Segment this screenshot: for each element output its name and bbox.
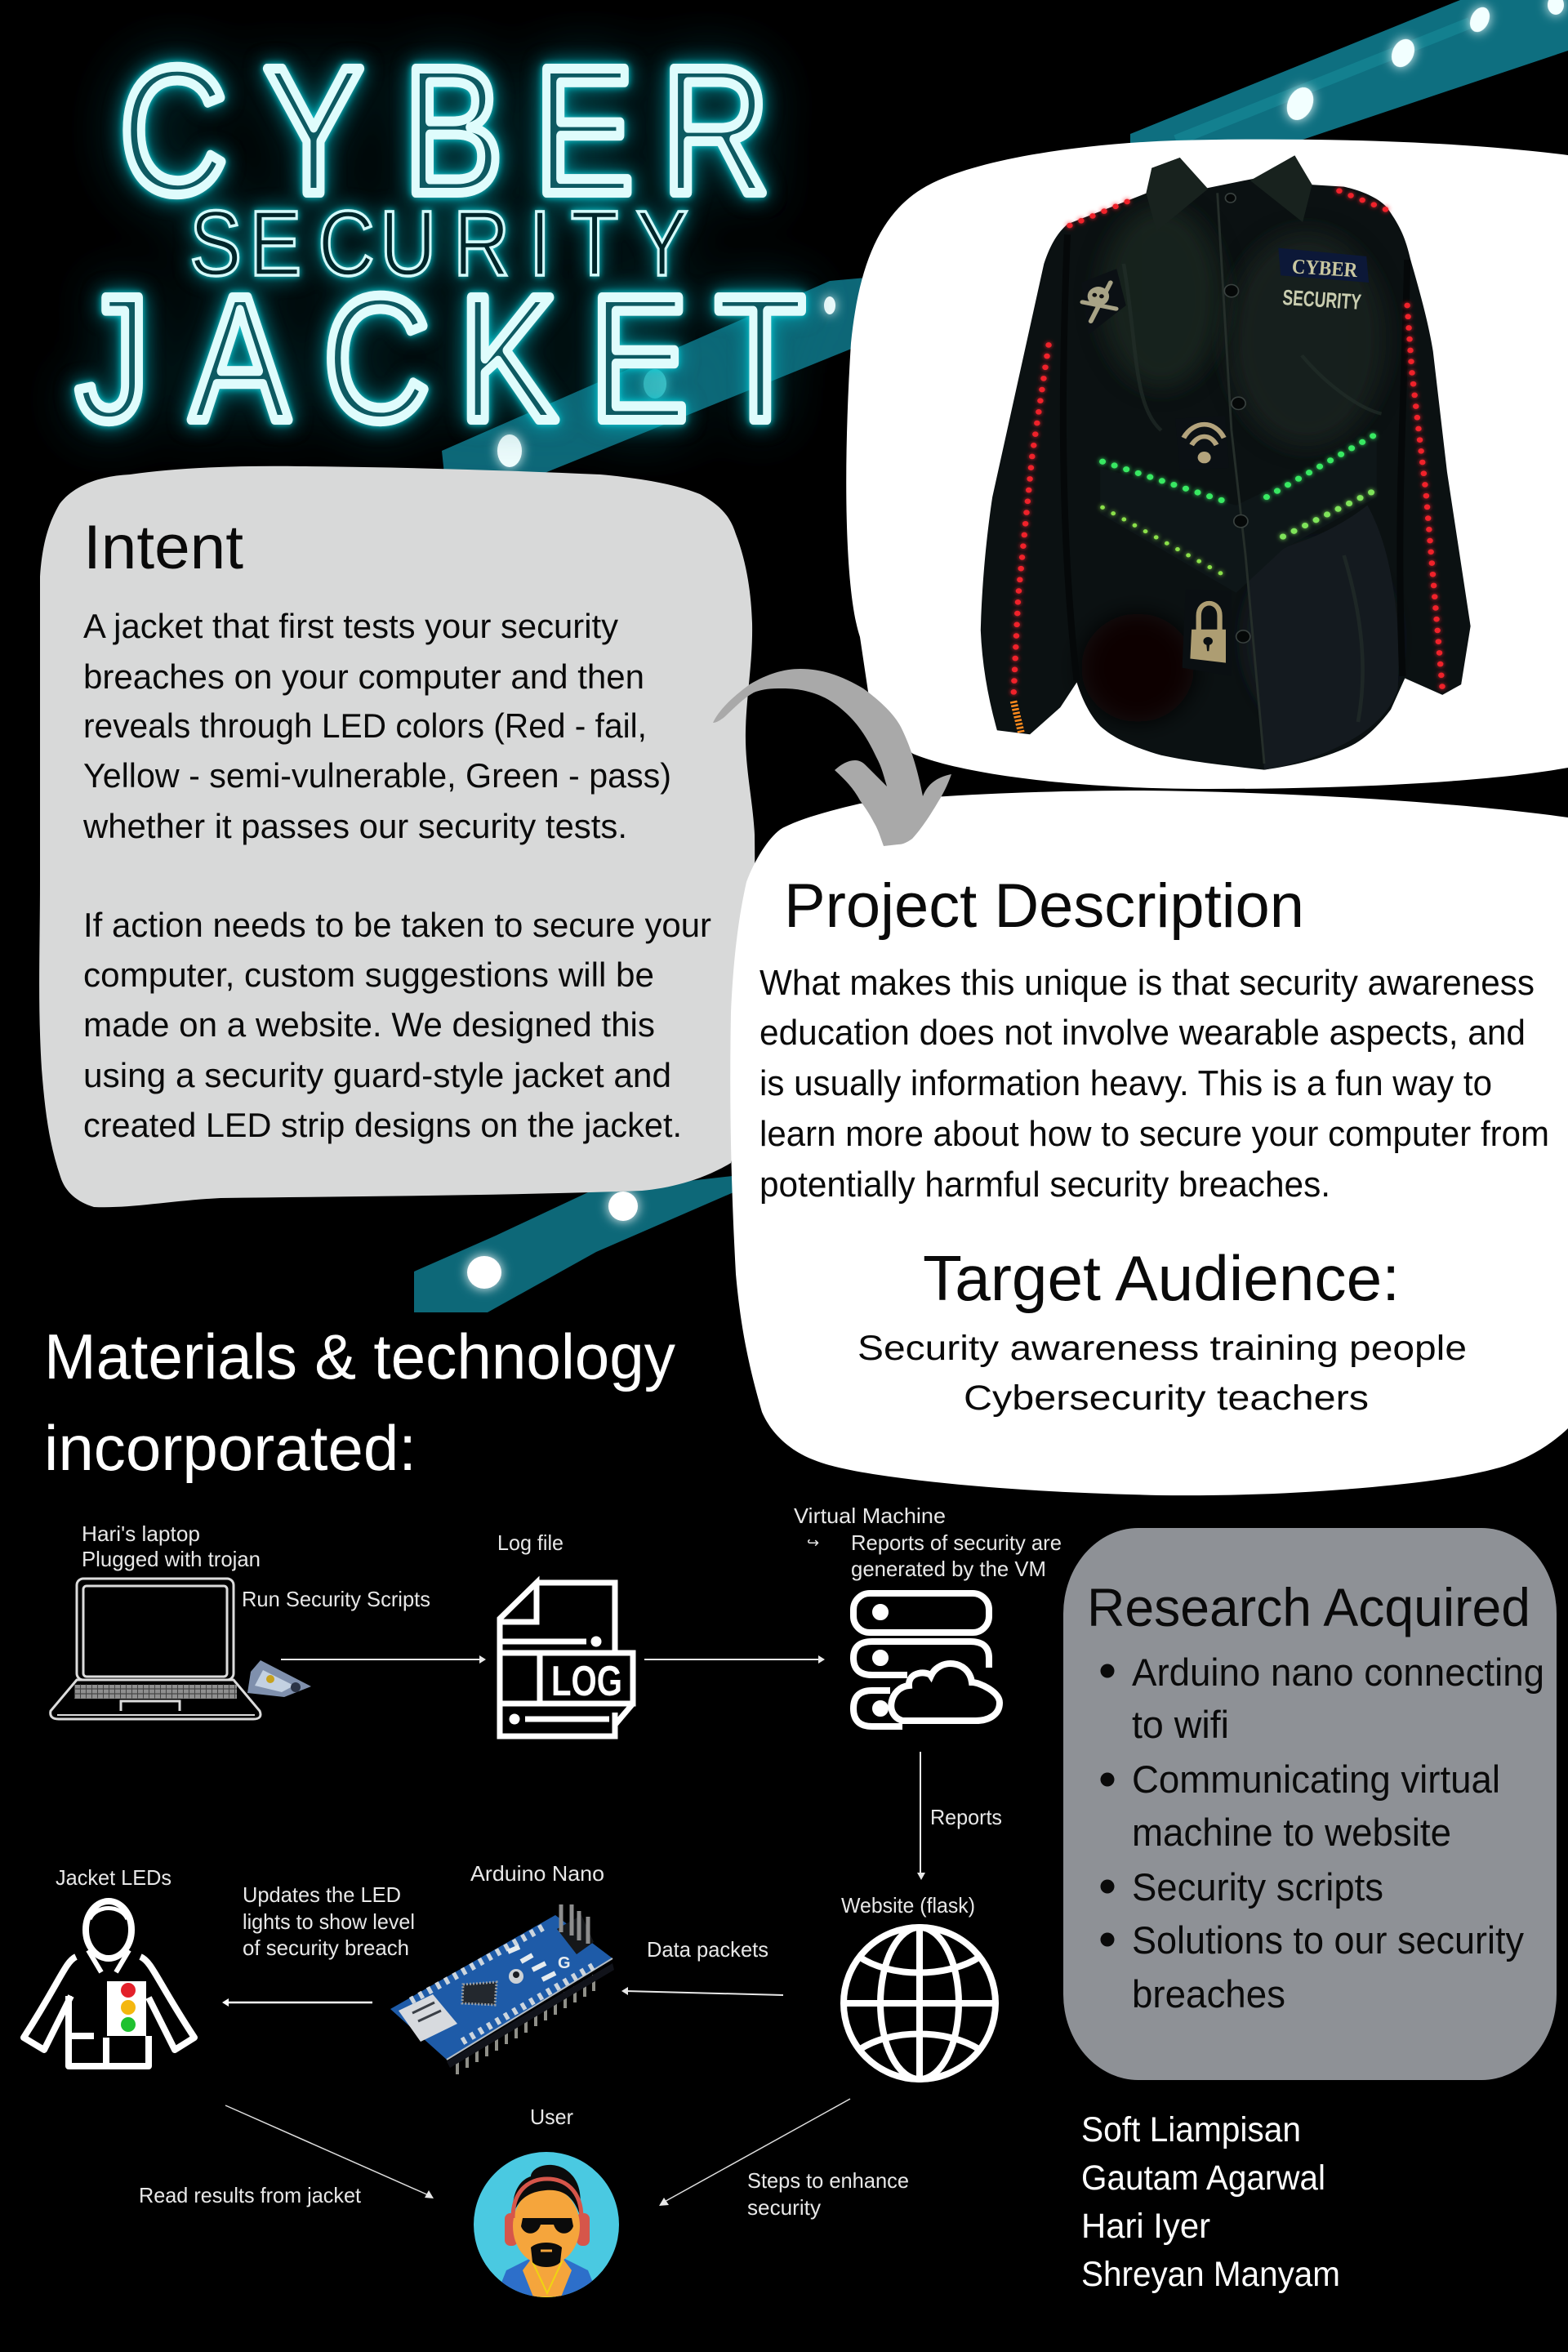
label: Run Security Scripts: Run Security Scripts — [242, 1587, 430, 1611]
label: Log file: Log file — [497, 1530, 564, 1555]
title line: JACKET: JACKET — [76, 260, 805, 458]
icon: log file — [500, 1583, 633, 1736]
research list: machine to website — [1132, 1811, 1451, 1854]
LED strips at waist — [1102, 433, 1379, 577]
research list: to wifi — [1132, 1703, 1229, 1746]
heading: materials and technology: Materials & technology — [44, 1321, 675, 1392]
text block: project description: learn more about how to secure your computer from — [760, 1114, 1549, 1154]
icon: laptop — [51, 1579, 261, 1719]
text block: team names: Soft Liampisan — [1081, 2110, 1301, 2149]
text block: project description: What makes this unique is that security awareness — [760, 963, 1535, 1003]
icon: globe — [844, 1927, 996, 2079]
panel: jacket photo — [846, 140, 1568, 789]
arrow: log file to virtual machine — [644, 1655, 825, 1664]
text block: team names: Shreyan Manyam — [1081, 2255, 1340, 2294]
text block: intent paragraph two: If action needs to be taken to secure your — [83, 906, 711, 944]
label: updates the LED: of security breach — [243, 1936, 409, 1960]
title: Cyber Security Jacket — [76, 30, 805, 458]
text block: intent paragraph two: using a security guard-style jacket and — [83, 1056, 671, 1094]
arrow: website to user — [659, 2099, 850, 2206]
title line: SECURITY: SECURITY — [189, 193, 688, 296]
icon: jacket with LEDs — [24, 1901, 194, 2066]
text block: project description — [760, 963, 1549, 1205]
panel: research acquired — [1063, 1528, 1557, 2080]
arrow: website to arduino — [621, 1987, 783, 1995]
label: Jacket LEDs: Jacket LEDs — [56, 1865, 172, 1890]
label: updates the LED: lights to show level — [243, 1909, 415, 1934]
text block: team names: Gautam Agarwal — [1081, 2158, 1325, 2198]
heading: Target Audience: Target Audience: — [923, 1242, 1400, 1314]
label: User: User — [530, 2105, 573, 2129]
text block: target audience: Security awareness training people — [858, 1329, 1467, 1368]
icon: user avatar — [474, 2152, 619, 2311]
label: Virtual Machine — [794, 1503, 1062, 1581]
arrow: laptop to log file — [281, 1655, 486, 1664]
text block: project description: education does not involve wearable aspects, and — [760, 1013, 1526, 1053]
jacket collar — [1146, 155, 1312, 231]
research list: Security scripts — [1132, 1865, 1383, 1909]
heading: Intent: Intent — [83, 513, 243, 582]
text block: team names — [1081, 2110, 1340, 2294]
label: Data packets: Data packets — [647, 1937, 768, 1962]
text block: target audience — [858, 1329, 1467, 1418]
patch: skull and crossbones — [1081, 269, 1126, 335]
label: steps to enhance: security — [747, 2195, 821, 2220]
label: Virtual Machine: Virtual Machine — [794, 1503, 946, 1528]
LED strip on cuff — [1013, 701, 1022, 733]
label: Virtual Machine: ↪ — [807, 1535, 819, 1552]
text block: intent paragraph one: breaches on your computer and then — [83, 657, 644, 696]
text block: target audience: Cybersecurity teachers — [964, 1379, 1369, 1418]
research list: Communicating virtual — [1132, 1757, 1500, 1801]
arrow: intent to project description — [713, 669, 951, 846]
panel: intent — [39, 466, 755, 1207]
LED strip: lower — [414, 1176, 739, 1312]
label: updates the LED — [243, 1882, 415, 1960]
heading: Project Description: Project Description — [784, 871, 1304, 941]
label: Reports: Reports — [930, 1805, 1002, 1829]
research list: Solutions to our security — [1132, 1918, 1524, 1962]
text block: intent paragraph two — [83, 906, 711, 1144]
text block: intent paragraph two: created LED strip designs on the jacket. — [83, 1106, 682, 1144]
text block: intent paragraph two: made on a website. We designed this — [83, 1005, 655, 1044]
text block: intent paragraph one: whether it passes our security tests. — [82, 807, 627, 845]
label: read results: Read results from jacket — [139, 2183, 362, 2207]
text block: intent paragraph one: Yellow - semi-vulnerable, Green - pass) — [83, 756, 671, 795]
icon: Arduino Nano board — [390, 1904, 614, 2074]
icon: Arduino Nano board: G — [558, 1954, 571, 1972]
text block: project description: is usually information heavy. This is a fun way to — [760, 1063, 1492, 1103]
label: Hari's laptop — [82, 1521, 261, 1571]
patch: cyber security — [1278, 248, 1369, 314]
arrow: arduino to jacket LEDs — [222, 1998, 372, 2007]
heading: materials and technology: incorporated: — [44, 1412, 416, 1484]
text block: intent paragraph one: A jacket that first tests your security — [83, 607, 618, 645]
title line: CYBER: CYBER — [119, 30, 770, 232]
jacket body — [981, 155, 1471, 770]
label: Hari's laptop: Plugged with trojan — [82, 1547, 261, 1571]
label: Website: Website (flask) — [841, 1893, 975, 1918]
log file text: LOG — [551, 1658, 622, 1705]
text block: intent paragraph two: computer, custom suggestions will be — [83, 956, 654, 994]
LED strips on sleeves — [1013, 191, 1442, 697]
icon: USB trojan — [247, 1660, 311, 1697]
panel: project description and target audience — [730, 791, 1568, 1495]
arrow: jacket to user — [225, 2105, 434, 2198]
text block: team names: Hari Iyer — [1081, 2207, 1210, 2246]
patch: cyber security: SECURITY — [1281, 285, 1362, 314]
text block: project description: potentially harmful security breaches. — [760, 1165, 1330, 1205]
patch: wifi — [1175, 416, 1229, 470]
heading: Research Acquired: Research Acquired — [1087, 1577, 1530, 1637]
patch: padlock — [1183, 590, 1232, 676]
research list: breaches — [1132, 1972, 1285, 2016]
patch: cyber security: CYBER — [1291, 255, 1359, 282]
label: Virtual Machine: generated by the VM — [851, 1557, 1046, 1581]
heading: materials and technology — [44, 1321, 675, 1484]
label: Arduino Nano: Arduino Nano — [470, 1861, 604, 1886]
icon: server and cloud — [853, 1593, 1000, 1726]
research list — [1101, 1650, 1544, 2016]
jacket photo illustration — [981, 155, 1471, 770]
arrow: virtual machine to website — [917, 1752, 925, 1880]
buttons — [1224, 194, 1250, 643]
label: steps to enhance — [747, 2168, 909, 2220]
text block: intent paragraph one — [82, 607, 671, 845]
text block: intent paragraph one: reveals through LED colors (Red - fail, — [83, 706, 647, 745]
research list: Arduino nano connecting — [1132, 1650, 1544, 1694]
label: Hari's laptop: Hari's laptop — [82, 1521, 200, 1546]
label: steps to enhance: Steps to enhance — [747, 2168, 909, 2193]
LED strip: behind title — [442, 278, 866, 482]
label: updates the LED: Updates the LED — [243, 1882, 401, 1907]
LED strip: top right — [1130, 0, 1568, 167]
label: Virtual Machine: Reports of security are — [851, 1530, 1062, 1555]
